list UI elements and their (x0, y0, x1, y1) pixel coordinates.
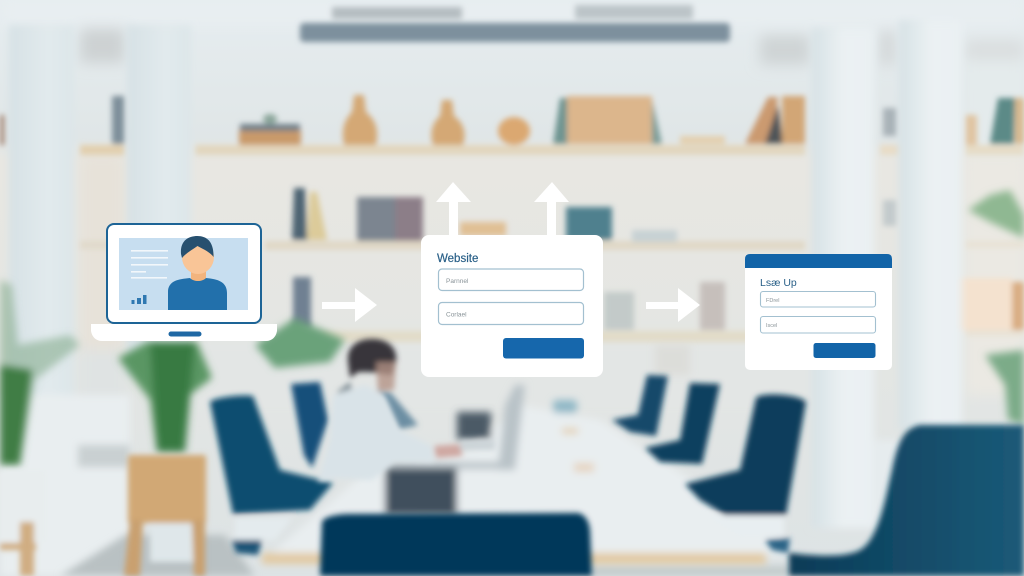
icon: signal bars (132, 295, 146, 304)
laptop base (91, 324, 277, 341)
input: password (438, 269, 584, 290)
arrow: up right (534, 182, 569, 236)
icon: user avatar (168, 236, 227, 310)
laptop trackpad notch (168, 332, 202, 336)
chair: front right (789, 425, 1024, 576)
header bar (745, 254, 892, 268)
heading: sign up: Lsæ Up (760, 277, 797, 289)
chair: left large (210, 395, 333, 514)
floor (60, 445, 790, 576)
chair: right near (685, 395, 806, 515)
input: email: FDrel (766, 298, 779, 304)
input: password (760, 316, 876, 333)
text lines (131, 250, 168, 279)
ceiling light (300, 5, 730, 42)
panel: website form (421, 235, 603, 377)
blurred person (318, 339, 495, 482)
table (262, 345, 790, 564)
laptop screen (107, 224, 261, 323)
chair: right rear (612, 375, 668, 436)
arrow: up left (436, 182, 471, 236)
chair: front centre (320, 513, 592, 576)
button: submit (814, 343, 876, 358)
chairs (210, 375, 1024, 576)
plant pots and stands (0, 455, 206, 576)
chair: left rear (291, 382, 328, 468)
heading: website: Website (437, 253, 478, 265)
arrow: website to sign up (646, 288, 700, 322)
input: contact: Corlael (446, 312, 467, 318)
screen content panel (119, 238, 248, 310)
plants (0, 190, 1024, 465)
button: submit (503, 338, 584, 358)
chair: far arm (378, 390, 418, 430)
input: email (760, 292, 876, 307)
input: contact (438, 302, 584, 324)
input: password: Parnnel (446, 278, 469, 285)
input: password: Iscel (766, 323, 777, 329)
chair: right mid (645, 383, 720, 464)
shelves and objects (0, 95, 1024, 342)
panel: sign up form (745, 254, 892, 370)
arrow: laptop to website (322, 288, 377, 322)
panel: laptop with user profile (91, 224, 277, 341)
